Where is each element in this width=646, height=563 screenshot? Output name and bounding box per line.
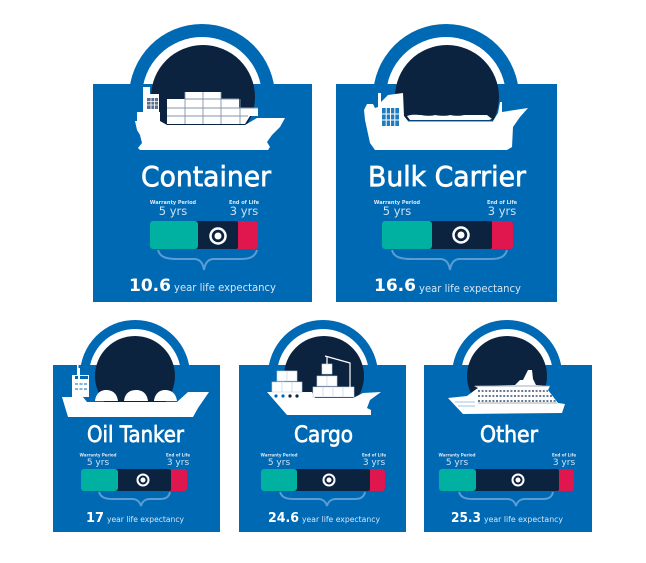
life expectancy: 17 [86, 511, 104, 526]
panel: container [93, 24, 312, 302]
end of life label: End of Life [552, 452, 576, 458]
warranty label [439, 452, 476, 468]
warranty label: 5 yrs [446, 458, 468, 468]
title: Container [141, 160, 271, 193]
icon: cargo ship [267, 356, 381, 415]
title: Oil Tanker [87, 423, 185, 448]
icon: bulk carrier ship [364, 93, 528, 150]
end of life label: 3 yrs [230, 204, 258, 218]
warranty label [150, 200, 197, 218]
life expectancy [374, 276, 521, 295]
warranty label: Warranty Period [261, 452, 298, 458]
life expectancy: year life expectancy [484, 515, 563, 524]
brace [459, 492, 553, 506]
arch [268, 320, 378, 430]
life expectancy: 24.6 [268, 511, 299, 526]
arch [373, 24, 519, 170]
end of life label [362, 452, 386, 468]
life expectancy: year life expectancy [174, 282, 276, 294]
end of life label: 3 yrs [553, 458, 575, 468]
life expectancy: 10.6 [129, 276, 171, 295]
life expectancy: year life expectancy [302, 515, 380, 524]
life expectancy [451, 511, 563, 526]
title: Bulk Carrier [368, 160, 526, 193]
warranty label: 5 yrs [383, 204, 411, 218]
life bar [382, 221, 513, 249]
brace [392, 250, 507, 270]
life bar [439, 469, 574, 491]
warranty label: Warranty Period [80, 452, 117, 458]
panel: bulk carrier [336, 24, 557, 302]
brace [158, 250, 257, 270]
arch [129, 24, 275, 170]
warranty label: Warranty Period [374, 200, 421, 206]
warranty label: 5 yrs [159, 204, 187, 218]
life bar [261, 469, 385, 491]
end of life label: 3 yrs [488, 204, 516, 218]
title: Other [480, 423, 539, 448]
icon: cruise ship [448, 370, 565, 414]
arch [452, 320, 562, 430]
warranty label [80, 452, 117, 468]
icon: container ship [135, 87, 285, 150]
brace [99, 492, 170, 506]
panel: oil tanker [53, 320, 220, 532]
life expectancy: 25.3 [451, 511, 481, 526]
life bar [81, 469, 187, 491]
brace [280, 492, 365, 506]
life expectancy [268, 511, 380, 526]
warranty label [261, 452, 298, 468]
life expectancy: year life expectancy [107, 515, 184, 524]
panel: cargo [239, 320, 406, 532]
arch [80, 320, 190, 430]
life expectancy [86, 511, 184, 526]
life expectancy: 16.6 [374, 276, 416, 295]
panel: other [424, 320, 592, 532]
life expectancy: year life expectancy [419, 283, 521, 295]
life bar [150, 221, 258, 249]
warranty label: 5 yrs [87, 458, 109, 468]
warranty label: Warranty Period [150, 200, 197, 206]
end of life label: 3 yrs [167, 458, 189, 468]
warranty label: Warranty Period [439, 452, 476, 458]
end of life label: End of Life [166, 452, 190, 458]
life expectancy [129, 276, 276, 295]
end of life label: 3 yrs [363, 458, 385, 468]
end of life label [552, 452, 576, 468]
warranty label [374, 200, 421, 218]
warranty label: 5 yrs [268, 458, 290, 468]
end of life label: End of Life [487, 200, 518, 206]
end of life label [166, 452, 190, 468]
icon: oil tanker ship [62, 362, 209, 417]
end of life label: End of Life [362, 452, 386, 458]
title: Cargo [294, 423, 353, 448]
end of life label: End of Life [229, 200, 260, 206]
